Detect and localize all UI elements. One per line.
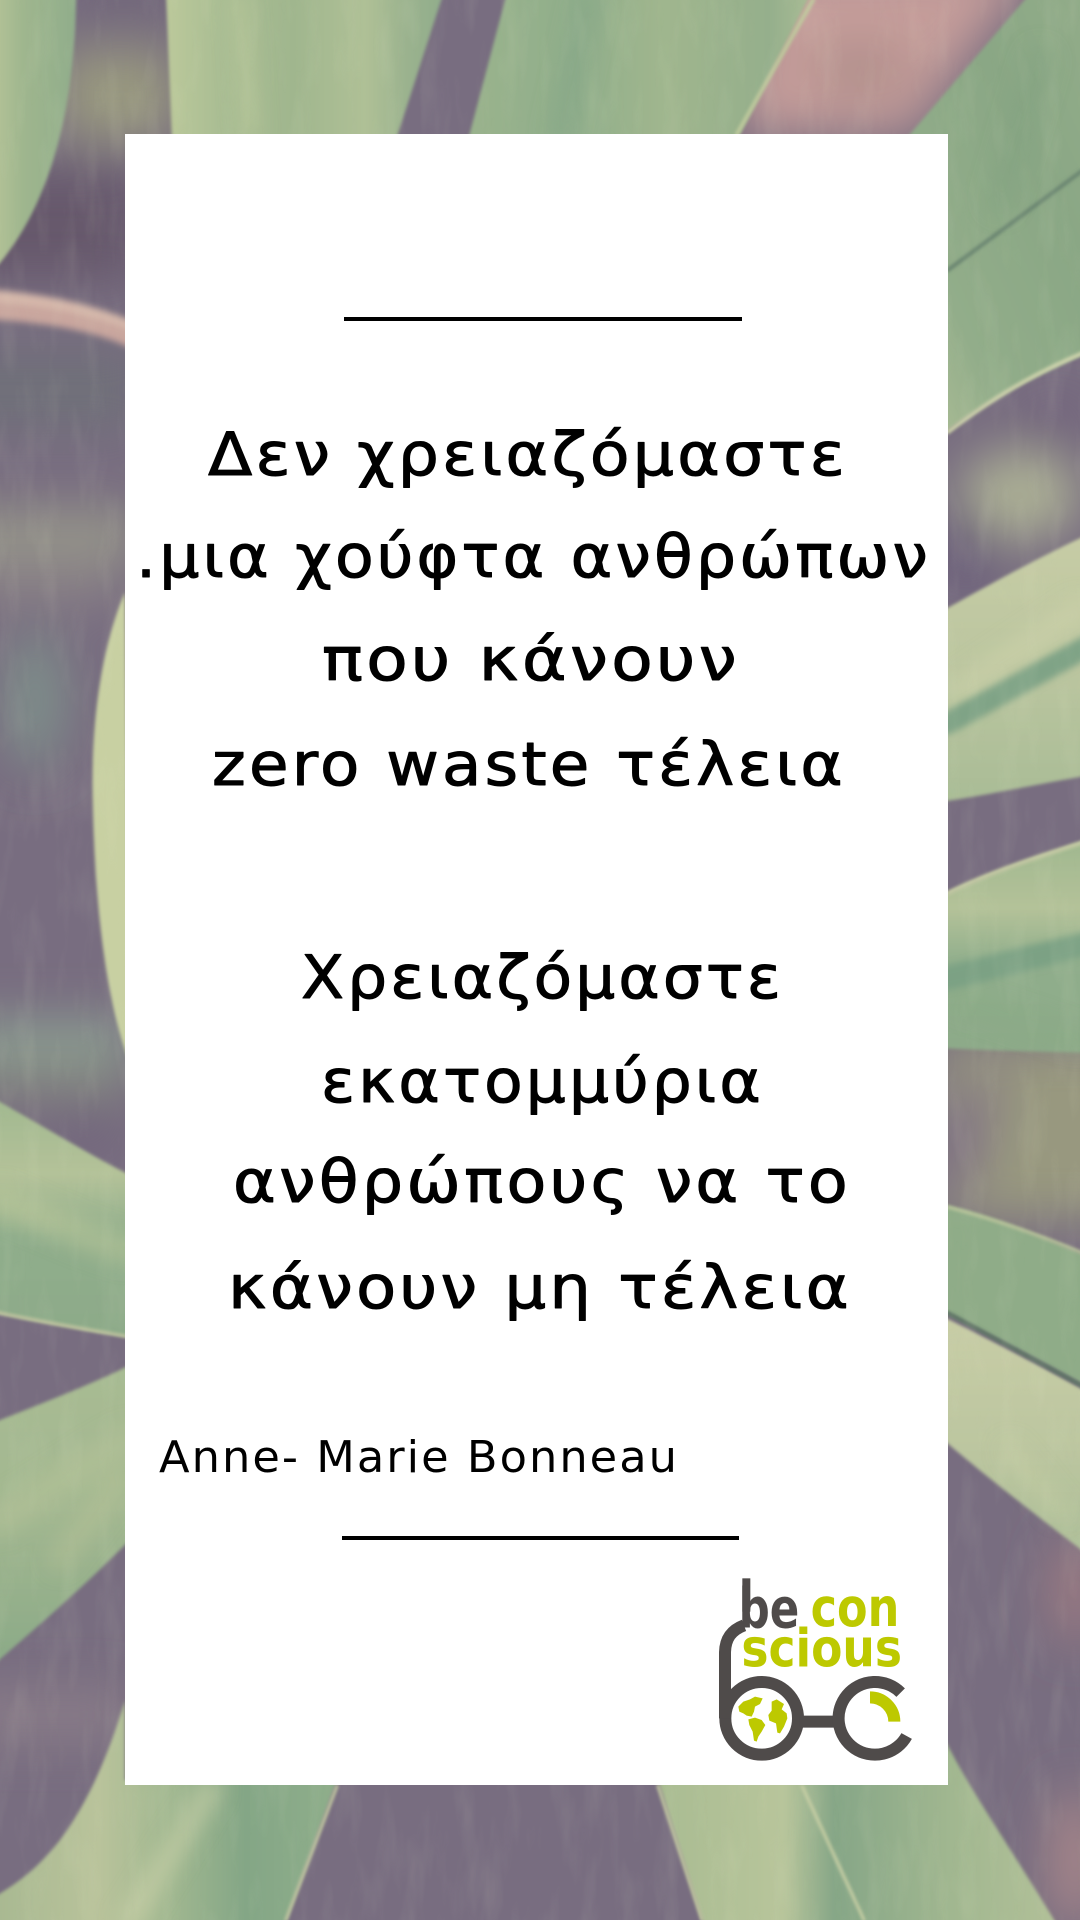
- author name: Anne- Marie Bonneau: [159, 1432, 679, 1483]
- logo globe continents: [738, 1697, 787, 1742]
- quote block: first stanza: που κάνουν: [322, 625, 740, 695]
- logo wordmark: con: [811, 1576, 899, 1639]
- pink stem: [0, 288, 135, 350]
- quote block: second stanza: εκατομμύρια: [321, 1047, 764, 1117]
- divider: top rule: [344, 317, 742, 321]
- quote block: second stanza: κάνουν μη τέλεια: [228, 1253, 852, 1323]
- logo wordmark: [739, 1576, 902, 1680]
- logo glasses: [725, 1625, 907, 1755]
- panel: white quote card: [125, 134, 948, 1785]
- divider: bottom rule: [342, 1536, 739, 1540]
- quote block: first stanza: zero waste τέλεια: [212, 730, 846, 800]
- quote block: second stanza: Χρειαζόμαστε: [301, 943, 784, 1013]
- leaf creases and edges: [948, 645, 1080, 978]
- quote block: second stanza: ανθρώπους να το: [233, 1147, 851, 1217]
- quote block: first stanza: Δεν χρειαζόμαστε: [208, 420, 848, 490]
- quote block: first stanza: [136, 420, 931, 800]
- logo green arc: [870, 1697, 894, 1722]
- logo wordmark: be: [739, 1576, 799, 1640]
- quote block: second stanza: [228, 943, 852, 1323]
- logo wordmark: scious: [741, 1619, 902, 1680]
- quote block: first stanza: .μια χούφτα ανθρώπων: [136, 522, 931, 592]
